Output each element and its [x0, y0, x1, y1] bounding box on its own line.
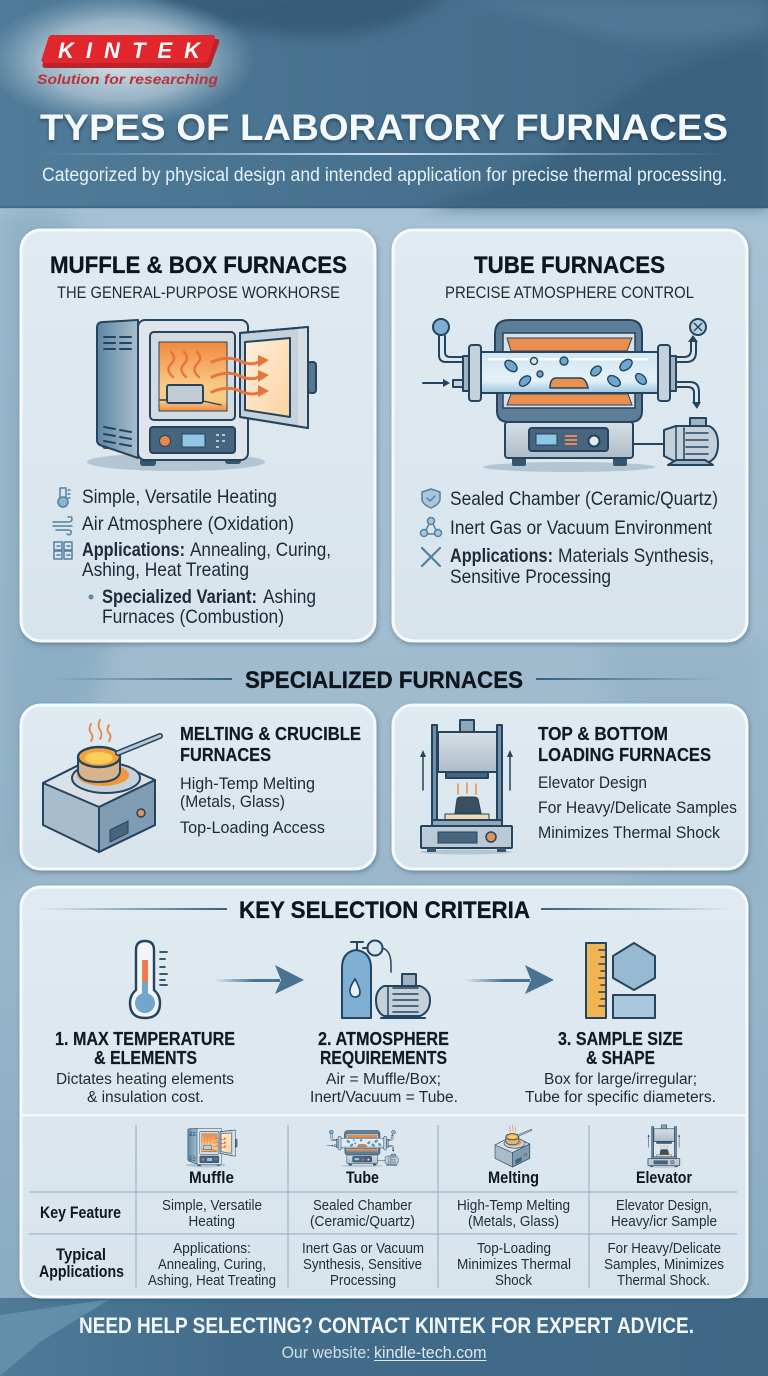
icon: tools: [422, 548, 440, 566]
row: typical applications: For Heavy/Delicate: [608, 1241, 721, 1257]
text: air atmosphere: Air Atmosphere (Oxidation): [82, 513, 294, 535]
title: TYPES OF LABORATORY FURNACES: [40, 106, 728, 148]
text: criterion 3: 3. SAMPLE SIZE: [558, 1029, 683, 1049]
text: specialized variant: Specialized Variant:: [102, 586, 257, 608]
text: criterion 2: Inert/Vacuum = Tube.: [310, 1089, 458, 1106]
text: criterion 3: Box for large/irregular;: [544, 1071, 697, 1088]
row: key feature: Heating: [188, 1214, 235, 1230]
icon: mini elevator: [648, 1125, 680, 1168]
text: applications: Annealing, Curing,: [190, 539, 331, 561]
text: sealed chamber: Sealed Chamber (Ceramic/Quartz): [450, 488, 718, 510]
text: melting details: High-Temp Melting: [180, 775, 315, 793]
row: typical applications: Thermal Shock.: [617, 1273, 710, 1289]
panel: muffle and box furnaces: [21, 230, 375, 641]
icon: thermometer large: [130, 941, 167, 1018]
subheading: muffle: THE GENERAL-PURPOSE WORKHORSE: [57, 284, 340, 302]
subtitle: Categorized by physical design and intended application for precise thermal processing.: [42, 165, 727, 186]
column headers: Melting: [488, 1169, 539, 1187]
row: typical applications: Applications: [39, 1263, 124, 1281]
panel: tube furnaces: [393, 230, 747, 641]
heading: muffle: MUFFLE & BOX FURNACES: [50, 252, 347, 279]
text: criterion 3: Tube for specific diameters.: [525, 1089, 716, 1106]
row: typical applications: Ashing, Heat Treating: [148, 1273, 276, 1289]
text: applications: [82, 539, 331, 581]
text: specialized variant: Ashing: [263, 586, 316, 608]
text: top bottom heading: TOP & BOTTOM: [538, 724, 668, 744]
icon: shield: [422, 489, 440, 508]
text: simple heating: Simple, Versatile Heating: [82, 486, 277, 508]
text: melting details: [180, 775, 325, 837]
text: criterion 3: & SHAPE: [586, 1048, 655, 1068]
text: applications tube: Applications:: [450, 545, 553, 567]
text: applications: Applications:: [82, 539, 185, 561]
row: typical applications: Top-Loading: [477, 1241, 551, 1257]
comparison table: [29, 1125, 737, 1289]
icon: network: [420, 518, 442, 536]
text: applications tube: [450, 545, 714, 588]
text: criterion 2: 2. ATMOSPHERE: [318, 1029, 449, 1049]
row: typical applications: Shock: [495, 1273, 533, 1289]
header band: [0, 0, 768, 208]
icon: mini tube: [327, 1130, 398, 1167]
text: criterion 1: [55, 1029, 235, 1106]
text: top bottom heading: LOADING FURNACES: [538, 745, 711, 765]
row: key feature: [40, 1198, 717, 1230]
text: melting heading: MELTING & CRUCIBLE: [180, 724, 361, 744]
text: melting details: (Metals, Glass): [180, 793, 285, 811]
subheading: tube: PRECISE ATMOSPHERE CONTROL: [445, 284, 694, 302]
icon: applications grid: [54, 542, 72, 559]
row: key feature: Heavy/icr Sample: [611, 1214, 717, 1230]
row: key feature: Elevator Design,: [616, 1198, 712, 1214]
row: key feature: (Ceramic/Quartz): [310, 1214, 415, 1230]
text: top bottom details: [538, 774, 737, 842]
text: criterion 1: & insulation cost.: [87, 1089, 204, 1106]
text: top bottom details: Minimizes Thermal Shock: [538, 824, 721, 842]
row: typical applications: [39, 1241, 724, 1289]
row: typical applications: Applications:: [173, 1241, 251, 1257]
panel: key selection criteria: [21, 887, 747, 1297]
text: criterion 2: REQUIREMENTS: [320, 1048, 447, 1068]
text: inert gas: Inert Gas or Vacuum Environment: [450, 517, 713, 539]
column headers: Muffle: [189, 1169, 234, 1187]
arrow: step 1 to 2: [215, 965, 304, 994]
title rule: [40, 153, 728, 155]
icon: gas cylinder and pump: [342, 940, 430, 1018]
heading: key selection: KEY SELECTION CRITERIA: [239, 897, 530, 924]
row: key feature: (Metals, Glass): [468, 1214, 559, 1230]
column headers: [189, 1169, 692, 1187]
footer website: [282, 1343, 486, 1362]
text: top bottom details: For Heavy/Delicate Samples: [538, 799, 737, 817]
icon: crucible furnace: [43, 720, 160, 852]
logo: KINTEK: Solution for researching: [37, 71, 218, 87]
row: typical applications: Inert Gas or Vacuum: [302, 1241, 424, 1257]
panel: melting and crucible: [21, 705, 375, 869]
row: typical applications: Typical: [56, 1246, 106, 1264]
text: applications: Ashing, Heat Treating: [82, 559, 249, 581]
icon: ruler and shapes: [586, 943, 655, 1018]
footer website: kindle-tech.com: [374, 1343, 486, 1362]
section heading: specialized furnaces: SPECIALIZED FURNACES: [245, 667, 523, 694]
text: specialized variant: [88, 586, 316, 628]
icon: elevator furnace: [420, 720, 513, 854]
icon: wind: [53, 517, 72, 535]
text: melting heading: FURNACES: [180, 745, 271, 765]
row: typical applications: Synthesis, Sensitive: [303, 1257, 422, 1273]
row: key feature: Sealed Chamber: [313, 1198, 412, 1214]
text: criterion 2: Air = Muffle/Box;: [326, 1071, 441, 1088]
footer website: Our website:: [282, 1343, 371, 1362]
text: top bottom details: Elevator Design: [538, 774, 647, 792]
column headers: Elevator: [636, 1169, 692, 1187]
text: criterion 3: [525, 1029, 716, 1106]
text: applications tube: Materials Synthesis,: [558, 545, 714, 567]
icon: mini melting: [495, 1125, 531, 1167]
logo: KINTEK: [37, 35, 219, 87]
text: criterion 1: 1. MAX TEMPERATURE: [55, 1029, 235, 1049]
logo: KINTEK: KINTEK: [58, 38, 202, 63]
icon: thermometer: [58, 488, 70, 507]
row: key feature: Key Feature: [40, 1204, 121, 1222]
icon: muffle furnace: [87, 320, 316, 471]
text: applications tube: Sensitive Processing: [450, 566, 611, 588]
row: key feature: High-Temp Melting: [457, 1198, 570, 1214]
row: typical applications: Processing: [330, 1273, 396, 1289]
heading: tube: TUBE FURNACES: [474, 252, 665, 279]
column headers: Tube: [346, 1169, 379, 1187]
icon: tube furnace: [423, 319, 718, 472]
text: melting details: Top-Loading Access: [180, 819, 325, 837]
text: top bottom heading: [538, 724, 711, 765]
row: typical applications: Minimizes Thermal: [457, 1257, 571, 1273]
text: criterion 2: [310, 1029, 458, 1106]
text: melting heading: [180, 724, 361, 765]
row: typical applications: Samples, Minimizes: [604, 1257, 724, 1273]
panel: top and bottom loading: [393, 705, 747, 869]
text: criterion 1: & ELEMENTS: [94, 1048, 197, 1068]
text: specialized variant: Furnaces (Combustion): [102, 606, 284, 628]
row: key feature: Simple, Versatile: [162, 1198, 262, 1214]
text: criterion 1: Dictates heating elements: [56, 1071, 234, 1088]
icon: mini muffle: [186, 1128, 237, 1167]
row: typical applications: Annealing, Curing,: [158, 1257, 266, 1273]
arrow: step 2 to 3: [465, 965, 554, 994]
